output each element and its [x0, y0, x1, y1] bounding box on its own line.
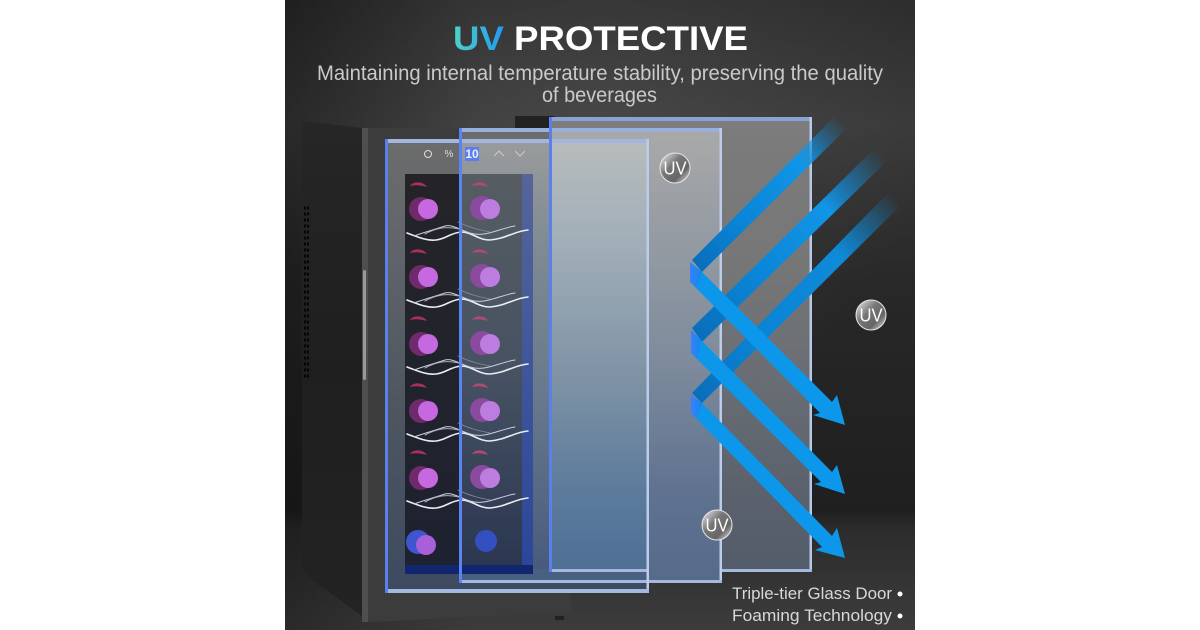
- UV badge top: [660, 153, 690, 183]
- control panel icons: %: [445, 149, 454, 160]
- subtitle: of beverages: [542, 84, 657, 107]
- feature list: Triple-tier Glass Door: [732, 584, 892, 603]
- glass layer 1 (front): [385, 139, 649, 593]
- control panel icons: [424, 147, 525, 161]
- title: UV PROTECTIVE: [453, 20, 748, 58]
- glass blue left edges: [385, 117, 552, 593]
- feature list: Foaming Technology: [732, 606, 893, 625]
- subtitle: [317, 62, 883, 107]
- control panel icons: 10: [465, 147, 479, 161]
- incoming UV rays: [692, 116, 902, 403]
- glass layer 2 (middle): [459, 128, 722, 583]
- glass layer 3 (rear): [549, 117, 812, 572]
- reflected UV arrows: [690, 262, 845, 558]
- wine fridge: [302, 116, 571, 622]
- bottles and shelves: [406, 182, 528, 555]
- UV badge bottom: [702, 510, 732, 540]
- UV badge right: [856, 300, 886, 330]
- fridge front door: [362, 128, 571, 622]
- fridge side panel: [302, 116, 555, 616]
- subtitle: Maintaining internal temperature stability, preserving the quality: [317, 62, 883, 85]
- bottle rack window: [405, 174, 533, 574]
- feature list: [732, 584, 902, 625]
- dark background panel: [285, 0, 915, 630]
